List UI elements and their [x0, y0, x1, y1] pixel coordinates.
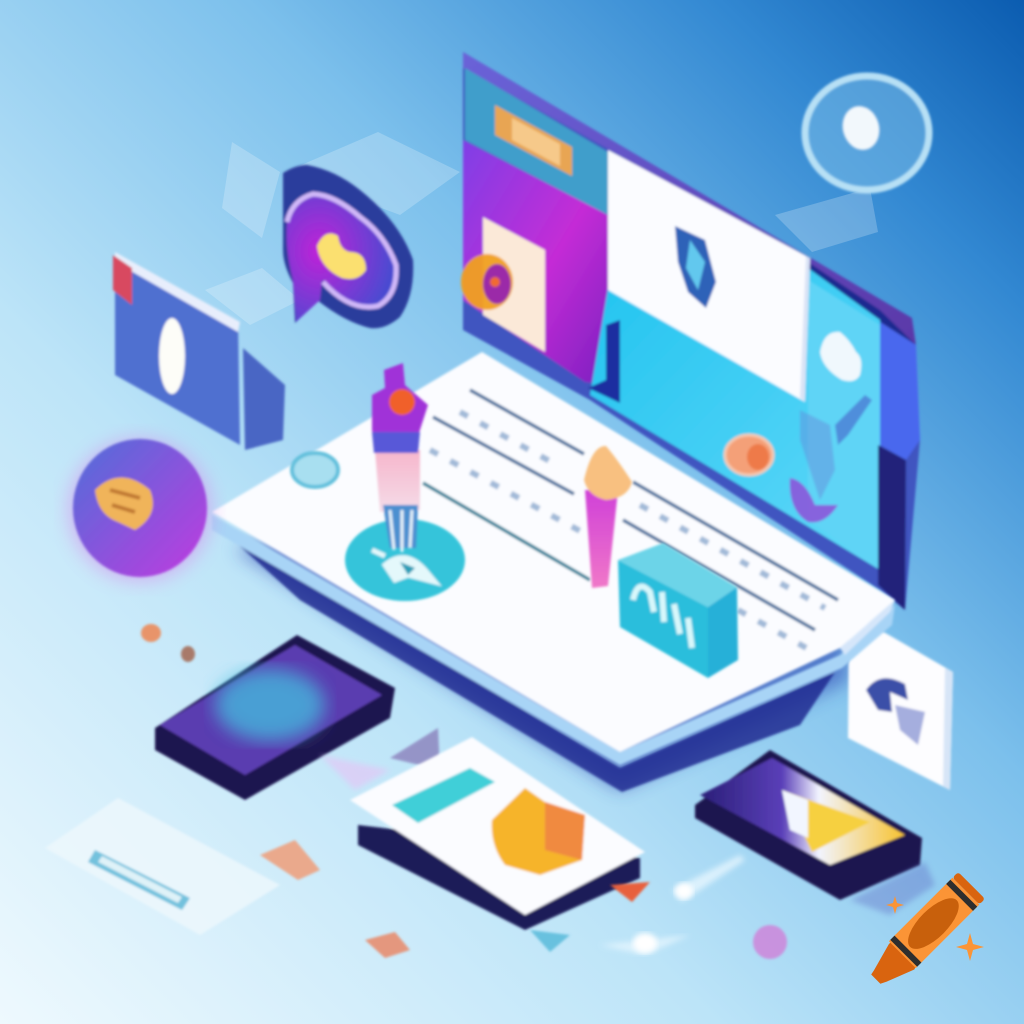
laptop shadow: [235, 480, 850, 790]
chat bubble icon: [283, 165, 413, 328]
white paper in magenta tile: [483, 217, 545, 352]
top-left blue tile: [465, 68, 608, 215]
small dots left: [141, 624, 195, 662]
dark arrow shard: [390, 728, 440, 770]
base top: [212, 352, 895, 752]
cyan disc on base: [345, 519, 465, 601]
scattered floor items: [260, 840, 787, 959]
top purple band: [463, 52, 916, 345]
right floating card: [848, 612, 953, 790]
pink pencil: [584, 446, 632, 588]
base underside: [222, 530, 835, 792]
white panel: [608, 150, 810, 402]
magenta tile: [463, 140, 610, 385]
laptop base: [212, 352, 895, 792]
phone left: [155, 635, 395, 800]
crayon tip: [865, 940, 919, 994]
tablet card left: [113, 252, 285, 450]
faint floor card: [45, 798, 280, 935]
purple pencil figure: [372, 363, 428, 552]
crayon logo: [863, 872, 985, 994]
center card: [350, 737, 645, 930]
floating ring icon: [805, 76, 929, 190]
small orange pill: [725, 435, 773, 475]
crayon body: [889, 878, 979, 968]
screen back frame: [463, 52, 920, 610]
cloud icon: [820, 332, 861, 381]
keyboard ghost keys: [430, 412, 825, 650]
orange card: [495, 105, 572, 176]
base side: [212, 515, 895, 765]
blue right side: [880, 322, 920, 460]
left round bubble: [68, 438, 212, 582]
cyan area: [590, 268, 880, 570]
abstract figure: [835, 395, 872, 445]
navy hinge block: [588, 320, 620, 403]
laptop screen: [461, 52, 920, 610]
faint background panels: [205, 132, 878, 325]
star sparkles: [886, 896, 904, 914]
orange coin on screen: [461, 254, 513, 310]
phone shadow: [850, 862, 935, 915]
small oval on base: [292, 453, 338, 487]
dark band under purple: [808, 262, 916, 345]
glowing sparks: [600, 855, 745, 955]
panel glyph: [675, 226, 716, 308]
phone right: [695, 750, 922, 900]
light cyan right column: [808, 280, 880, 570]
cyan block: [618, 543, 738, 678]
crayon cap: [953, 872, 985, 904]
keyboard long lines: [423, 390, 838, 630]
dark navy right edge: [878, 445, 906, 610]
